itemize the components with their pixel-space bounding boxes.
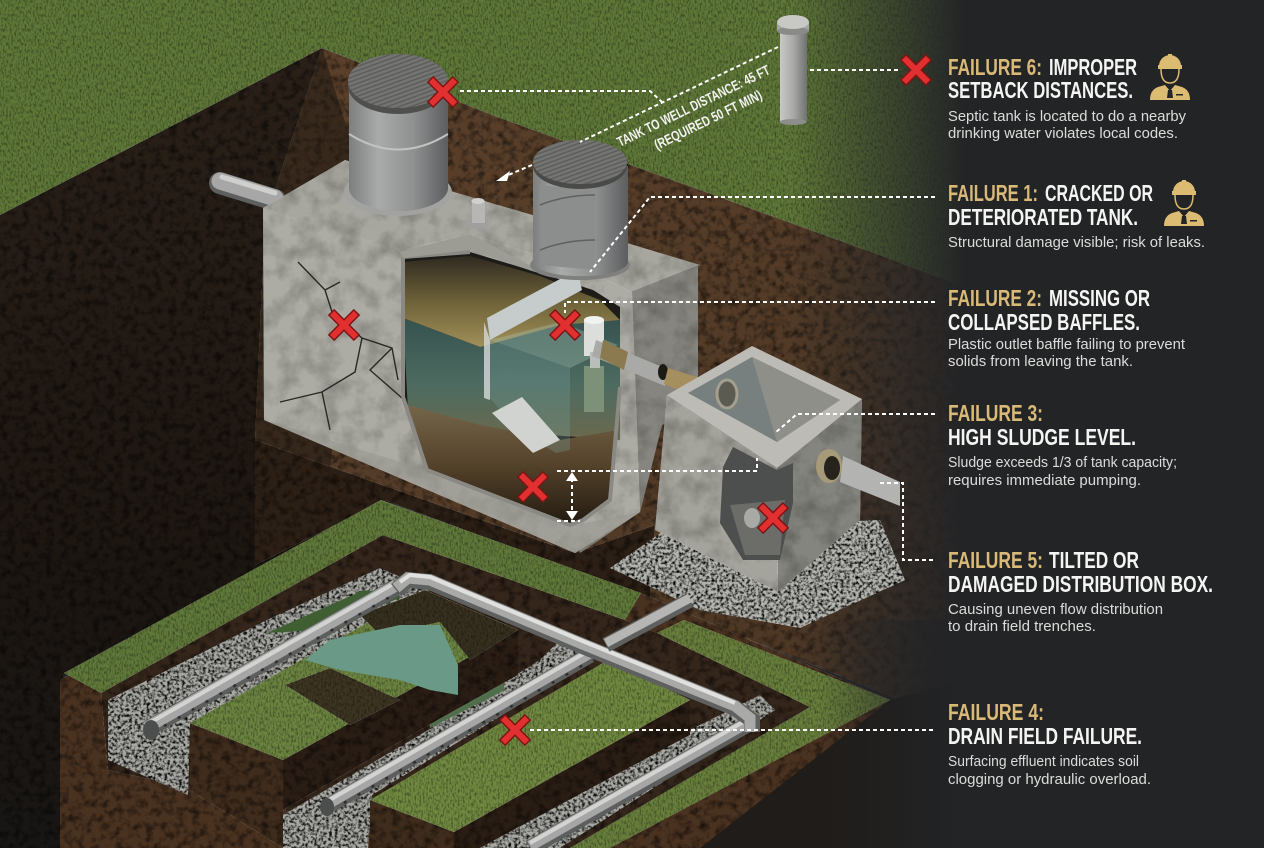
PVC outlet tee bbox=[584, 316, 604, 412]
scum layer bbox=[403, 256, 620, 347]
left lateral pipe bbox=[146, 583, 395, 734]
sludge layer bbox=[408, 405, 618, 525]
sludge depth arrow bbox=[557, 472, 580, 521]
gravel middle trench bbox=[283, 640, 600, 848]
setback distance label bbox=[614, 62, 781, 167]
callout: failure 4: clogging or hydraulic overload. bbox=[948, 772, 1151, 788]
lawn surface bbox=[0, 0, 1000, 300]
algae pools bbox=[267, 590, 402, 633]
inlet pipe bbox=[220, 177, 275, 200]
callout: failure 1: Structural damage visible; risk of leaks. bbox=[948, 235, 1205, 251]
callout: failure 3: FAILURE 3: bbox=[948, 400, 1043, 426]
callout: failure 6: Septic tank is located to do a nearby bbox=[948, 109, 1187, 125]
box interior inlet hole bbox=[717, 380, 737, 408]
callout: failure 3: requires immediate pumping. bbox=[948, 473, 1141, 489]
callout: failure 4: DRAIN FIELD FAILURE. bbox=[948, 723, 1142, 749]
water layer bbox=[403, 318, 620, 440]
second lawn block sides bbox=[454, 700, 690, 848]
callout: failure 5: TILTED OR bbox=[1049, 547, 1139, 573]
field soil base bbox=[60, 500, 890, 848]
callout: failure 1: CRACKED OR bbox=[1045, 180, 1153, 206]
callout: failure 5: FAILURE 5: bbox=[948, 547, 1043, 573]
box top rim bbox=[667, 346, 862, 468]
callout: failure 6: IMPROPER bbox=[1049, 54, 1137, 80]
callout: failure 1 bbox=[948, 180, 1205, 251]
callout: failure 5 bbox=[948, 547, 1213, 635]
small vent cap bbox=[467, 198, 489, 229]
front concrete lip bbox=[400, 234, 590, 280]
callout: failure 4: Surfacing effluent indicates soil bbox=[948, 754, 1139, 770]
tank front wall bbox=[263, 208, 640, 553]
excavation pit soil bbox=[0, 48, 1000, 848]
riser left with lid bbox=[344, 54, 452, 216]
tank bottom shadow bbox=[264, 420, 640, 553]
header pipe bbox=[396, 575, 752, 732]
callout: failure 6 bbox=[948, 54, 1187, 142]
callout: failure 2 bbox=[948, 285, 1185, 370]
tank top slab bbox=[263, 160, 700, 300]
red X marker distribution box bbox=[760, 505, 786, 531]
setback distance label: TANK TO WELL DISTANCE: 45 FT bbox=[614, 62, 773, 150]
callout: failure 2: MISSING OR bbox=[1049, 285, 1150, 311]
callout: failure 3: Sludge exceeds 1/3 of tank capacity; bbox=[948, 455, 1177, 471]
gravel bed under distribution box bbox=[610, 520, 905, 628]
right dark fade over scene bbox=[790, 0, 965, 848]
pipe open ends bbox=[143, 720, 334, 816]
callout: failure 5: to drain field trenches. bbox=[948, 619, 1096, 635]
trench floors bbox=[101, 535, 810, 848]
front wall cracks bbox=[280, 262, 402, 430]
callout: failure 4: FAILURE 4: bbox=[948, 699, 1044, 725]
red X marker baffle bbox=[552, 312, 578, 338]
riser right with lid bbox=[530, 140, 630, 280]
cutaway interior bbox=[403, 252, 620, 525]
septic tank bbox=[263, 160, 700, 553]
outlet pipe to distribution box bbox=[592, 340, 700, 395]
callout: failure 2: Plastic outlet baffle failing to prevent bbox=[948, 337, 1185, 353]
leader: failure 4 bbox=[530, 729, 935, 731]
callout: failure 4 bbox=[948, 699, 1151, 788]
red X marker cracks bbox=[331, 312, 357, 338]
setback distance line bbox=[506, 47, 778, 176]
inlet to header bbox=[606, 598, 690, 645]
leader: failure 5 bbox=[880, 483, 935, 560]
outlet fitting on box bbox=[840, 456, 900, 506]
tank right outer wall bbox=[572, 265, 698, 553]
box interior bbox=[688, 357, 840, 442]
red X marker failure 6 bbox=[903, 57, 929, 83]
leader: failure 6 bbox=[810, 69, 900, 71]
callout: failure 3: HIGH SLUDGE LEVEL. bbox=[948, 424, 1136, 450]
leader lines bbox=[460, 47, 935, 730]
leader: failure 1 bbox=[590, 197, 935, 272]
leader: sludge level bbox=[557, 458, 757, 471]
callout: failure 6: FAILURE 6: bbox=[948, 54, 1042, 80]
callout: failure 6: drinking water violates local codes. bbox=[948, 126, 1178, 142]
callout: failure 1: FAILURE 1: bbox=[948, 180, 1038, 206]
lower right fade bbox=[820, 620, 965, 848]
leader: riser to setback bbox=[460, 91, 662, 102]
leader: failure 3 bbox=[775, 414, 935, 433]
box right face bbox=[777, 399, 862, 592]
outlet baffle wall bbox=[487, 270, 582, 340]
dead grass patches bbox=[360, 590, 518, 660]
drain field bbox=[60, 500, 890, 848]
translucent baffle tank section bbox=[490, 340, 570, 453]
callout: failure 2: COLLAPSED BAFFLES. bbox=[948, 309, 1140, 335]
first lawn block sides bbox=[283, 630, 518, 810]
setback distance label: (REQUIRED 50 FT MIN) bbox=[651, 87, 764, 153]
red X marker riser bbox=[430, 79, 456, 105]
icon: worker failure 1 bbox=[1164, 180, 1204, 226]
callout: failure 2: FAILURE 2: bbox=[948, 285, 1042, 311]
upper left grass strip bbox=[64, 500, 641, 693]
fallen baffle piece bbox=[492, 397, 560, 453]
callout: failure 6: SETBACK DISTANCES. bbox=[948, 77, 1133, 103]
surfacing effluent bbox=[305, 625, 458, 695]
icon: worker failure 6 bbox=[1150, 54, 1190, 100]
gravel right trench bbox=[480, 695, 775, 848]
distribution box bbox=[655, 346, 900, 592]
right lateral pipe bbox=[530, 717, 752, 848]
setback arrowhead bbox=[496, 171, 510, 181]
leader: failure 2 bbox=[565, 302, 935, 313]
right grass strip bbox=[570, 620, 890, 848]
callout: failure 5: Causing uneven flow distribution bbox=[948, 602, 1163, 618]
first lawn block bbox=[190, 590, 518, 760]
callout: failure 1: DETERIORATED TANK. bbox=[948, 204, 1138, 230]
box left face bbox=[655, 395, 778, 592]
red X marker drain field bbox=[502, 717, 528, 743]
rim of cutaway bbox=[403, 252, 620, 525]
second lawn block bbox=[370, 660, 690, 832]
septic well pole bbox=[777, 15, 809, 125]
gravel left trench bbox=[108, 568, 430, 795]
red X marker sludge bbox=[520, 474, 546, 500]
dark soil lower right bbox=[700, 680, 965, 848]
middle lateral pipe bbox=[326, 650, 590, 811]
box front opening bbox=[720, 447, 793, 560]
callout: failure 2: solids from leaving the tank. bbox=[948, 354, 1133, 370]
callout: failure 3 bbox=[948, 400, 1177, 489]
